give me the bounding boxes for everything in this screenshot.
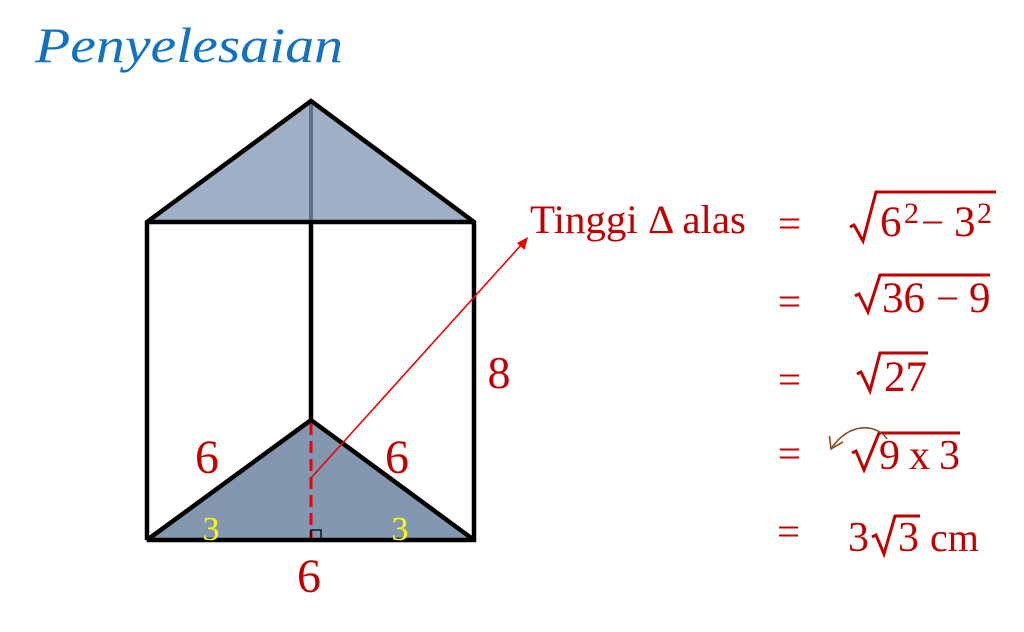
arrow: height to label xyxy=(311,237,528,478)
step 5: cm xyxy=(930,515,979,560)
step 1: 6 xyxy=(880,199,902,246)
label: left half 3: 3 xyxy=(202,511,220,548)
label: base 6: 6 xyxy=(297,550,321,603)
step 2: = xyxy=(778,279,801,324)
step 1: 3 xyxy=(954,199,976,246)
label: height 8: 8 xyxy=(488,347,510,398)
step 1: 2 xyxy=(904,197,919,230)
step 5: 3 xyxy=(848,515,869,561)
label: right side 6: 6 xyxy=(385,431,409,484)
hidden top centre edge xyxy=(309,101,313,222)
title: Penyelesaian xyxy=(34,17,343,73)
step 1: − xyxy=(921,199,944,245)
calculation xyxy=(777,192,996,561)
step 3: = xyxy=(778,357,801,402)
centre edge xyxy=(309,222,313,420)
step 2: − xyxy=(936,275,959,321)
arrow: curved factor arrow xyxy=(830,428,887,449)
step 3 xyxy=(778,353,928,402)
step 4 xyxy=(778,431,960,479)
label: Tinggi alas: Tinggi Δ alas xyxy=(530,197,746,242)
step 2: 9 xyxy=(969,275,990,322)
dashed height line xyxy=(310,423,312,538)
step 1: = xyxy=(778,201,801,246)
prism diagram xyxy=(147,101,474,540)
prism outline xyxy=(147,101,474,540)
top triangle face xyxy=(147,101,474,222)
step 5: 3 xyxy=(898,515,919,561)
label: left side 6: 6 xyxy=(195,431,219,484)
step 4: 9 x 3 xyxy=(879,433,960,479)
right angle marker xyxy=(311,530,321,539)
side labels xyxy=(195,347,510,603)
bottom triangle face xyxy=(147,420,474,540)
step 3: 27 xyxy=(884,354,927,401)
step 5: = xyxy=(777,509,800,554)
step 5 xyxy=(777,509,979,561)
step 4: = xyxy=(778,431,801,476)
step 1 xyxy=(778,192,996,246)
step 2: 36 xyxy=(882,275,925,322)
step 1: 2 xyxy=(977,197,992,230)
label: right half 3: 3 xyxy=(392,511,408,548)
step 2 xyxy=(778,275,990,324)
